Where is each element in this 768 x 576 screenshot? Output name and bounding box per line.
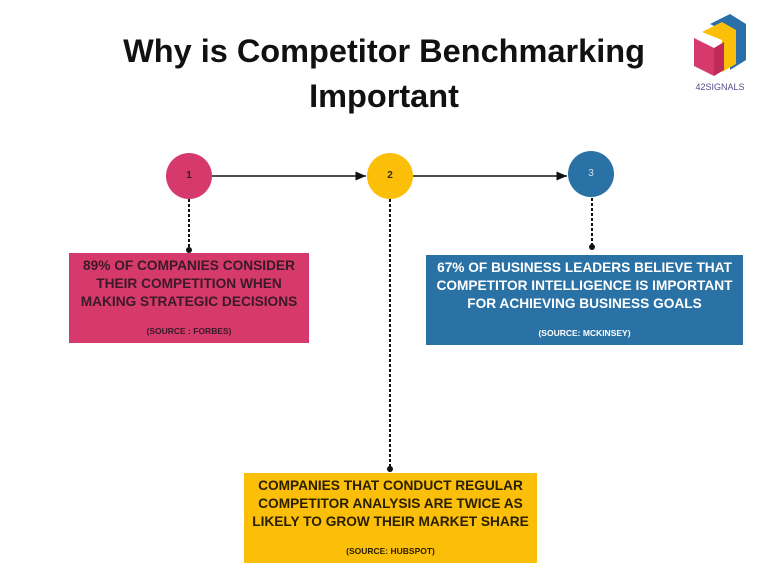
title <box>123 33 645 114</box>
title: Why is Competitor Benchmarking <box>123 33 645 69</box>
panel 2: COMPANIES THAT CONDUCT REGULAR <box>258 478 523 493</box>
step 3 circle: 3 <box>588 168 594 179</box>
step 1 circle: 1 <box>186 170 192 181</box>
panel 1 <box>69 253 309 343</box>
logo: 42signals <box>694 14 746 92</box>
panel 1: THEIR COMPETITION WHEN <box>96 276 282 291</box>
step 1 circle <box>166 153 212 199</box>
panel 2: COMPETITOR ANALYSIS ARE TWICE AS <box>258 496 523 511</box>
panel 2 <box>244 473 537 563</box>
step 2 circle: 2 <box>387 170 393 181</box>
panel 2: (SOURCE: HUBSPOT) <box>346 546 435 556</box>
panel 3: 67% OF BUSINESS LEADERS BELIEVE THAT <box>437 260 732 275</box>
panel 3 <box>426 255 743 345</box>
panel 2: LIKELY TO GROW THEIR MARKET SHARE <box>252 514 529 529</box>
title: Important <box>309 78 459 114</box>
logo: 42signals: 42SIGNALS <box>695 82 745 92</box>
step 2 circle <box>367 153 413 199</box>
panel 3: (SOURCE: MCKINSEY) <box>538 328 631 338</box>
panel 3: FOR ACHIEVING BUSINESS GOALS <box>467 296 702 311</box>
panel 1: 89% OF COMPANIES CONSIDER <box>83 258 295 273</box>
step 3 circle <box>568 151 614 197</box>
panel 1: (SOURCE : FORBES) <box>146 326 232 336</box>
panel 1: MAKING STRATEGIC DECISIONS <box>81 294 297 309</box>
panel 3: COMPETITOR INTELLIGENCE IS IMPORTANT <box>436 278 733 293</box>
